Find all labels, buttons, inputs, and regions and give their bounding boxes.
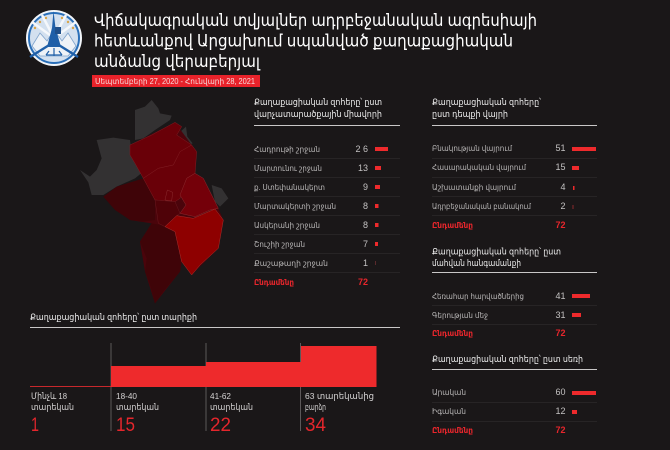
row: female <box>432 406 577 416</box>
row: residence: 51 <box>555 143 566 153</box>
row: workplace <box>432 182 574 192</box>
row: total: Ընդամենը <box>432 426 473 435</box>
row: total <box>432 220 566 230</box>
row: Kashatagh: Քաշաթաղի շրջան <box>254 259 328 268</box>
row: Martuni <box>254 163 381 173</box>
age group: 18-40: 18-40 <box>116 391 137 401</box>
row: Martakert: Մարտակերտի շրջան <box>254 202 336 211</box>
heading: circumstances of death: Քաղաքացիական զոհերը՝ ըստ <box>432 246 561 256</box>
row: residence <box>432 143 596 153</box>
age group: under 18: տարեկան <box>31 402 74 412</box>
panel: circumstances of death <box>432 246 597 338</box>
panel: place of incident <box>432 97 597 230</box>
row: Martakert <box>254 201 378 211</box>
silhouette base layer <box>103 122 223 303</box>
row: Askeran: Ասկերանի շրջան <box>254 221 320 230</box>
row: total <box>432 425 566 435</box>
age group: 63 and older: 63 տարեկանից <box>305 391 374 401</box>
map: Artsakh regions <box>80 100 228 303</box>
row: workplace: 4 <box>560 182 566 192</box>
row: long-range strikes <box>432 291 590 301</box>
row: Askeran <box>254 220 378 230</box>
title: հետևանքով Արցախում սպանված քաղաքացիական <box>94 32 513 50</box>
row: Martakert: 8 <box>363 201 368 211</box>
panel: administrative units <box>254 97 400 287</box>
age group: 41-62: տարեկան <box>210 402 253 412</box>
heading: by age: Քաղաքացիական զոհերը՝ ըստ տարիքի <box>30 312 197 322</box>
row: total: 72 <box>555 425 566 435</box>
heading: administrative units <box>254 97 400 126</box>
age group: 18-40 <box>116 391 159 436</box>
row: Hadrut <box>254 144 388 154</box>
row: Stepanakert: 9 <box>363 182 368 192</box>
row: Azerbaijani army: 2 <box>560 201 566 211</box>
row: Shushi: 7 <box>363 239 368 249</box>
row: total <box>432 328 566 338</box>
heading: place of incident: ըստ դեպքի վայրի <box>432 109 508 119</box>
row: Stepanakert: ք. Ստեփանակերտ <box>254 183 325 192</box>
row: male <box>432 387 596 397</box>
row: Askeran: 8 <box>363 220 368 230</box>
row: Hadrut: 2 6 <box>355 144 368 154</box>
row: long-range strikes: Հեռահար հարվածներից <box>432 292 524 301</box>
row: in captivity: 31 <box>555 310 566 320</box>
row: Kashatagh <box>254 258 376 268</box>
row: female: 12 <box>555 406 566 416</box>
heading: by sex: Քաղաքացիական զոհերը՝ ըստ սեռի <box>432 354 583 364</box>
row: in captivity <box>432 310 581 320</box>
row: in captivity: Գերության մեջ <box>432 311 488 320</box>
age group: 41-62 <box>210 391 253 436</box>
row: Kashatagh: 1 <box>363 258 368 268</box>
age group: 63 and older: 34 <box>305 414 326 436</box>
row: female: Իգական <box>432 407 466 416</box>
row: total: Ընդամենը <box>254 278 294 287</box>
row: male: 60 <box>555 387 566 397</box>
row: total: 72 <box>555 220 566 230</box>
heading: administrative units: վարչատարածքային միավորի <box>254 109 382 119</box>
heading: circumstances of death <box>432 246 597 272</box>
age group: 41-62: 22 <box>210 414 231 436</box>
row: Martuni: 13 <box>358 163 368 173</box>
row: public place: 15 <box>555 162 566 172</box>
row: male: Արական <box>432 388 466 397</box>
age group: under 18: Մինչև 18 <box>31 391 67 401</box>
row: long-range strikes: 41 <box>555 291 566 301</box>
row: total <box>254 277 368 287</box>
heading: place of incident: Քաղաքացիական զոհերը՝ <box>432 97 541 107</box>
row: residence: Բնակության վայրում <box>432 144 513 153</box>
row: total: Ընդամենը <box>432 221 473 230</box>
row: workplace: Աշխատանքի վայրում <box>432 183 517 192</box>
age group: 41-62: 41-62 <box>210 391 231 401</box>
age group: 18-40: տարեկան <box>116 402 159 412</box>
row: Hadrut: Հադրութի շրջան <box>254 145 320 154</box>
age chart: stepped bars <box>30 346 376 387</box>
row: public place <box>432 162 579 172</box>
title <box>94 12 537 71</box>
row: Shushi: Շուշիի շրջան <box>254 240 305 249</box>
panel: by age <box>30 312 400 436</box>
row: public place: Հասարակական վայրում <box>432 163 527 172</box>
icon: ombudsman emblem <box>26 10 82 66</box>
row: total: 72 <box>555 328 566 338</box>
heading: place of incident <box>432 97 597 126</box>
date badge: Սեպտեմբերի 27, 2020 - Հունվարի 28, 2021 <box>95 77 255 86</box>
title: Վիճակագրական տվյալներ ադրբեջանական ագրեսիայի <box>94 12 537 30</box>
age group: under 18 <box>31 391 74 436</box>
row: Shushi <box>254 239 378 249</box>
heading: administrative units: Քաղաքացիական զոհերը՝ ըստ <box>254 97 382 107</box>
panel: by sex <box>432 354 597 435</box>
row: Azerbaijani army: Ադրբեջանական բանակում <box>432 202 532 211</box>
title: անձանց վերաբերյալ <box>94 53 260 71</box>
row: total: 72 <box>358 277 368 287</box>
age group: 63 and older <box>305 391 374 436</box>
age group: 18-40: 15 <box>116 414 135 436</box>
heading: circumstances of death: մահվան հանգամանքի <box>432 258 521 268</box>
row: Stepanakert <box>254 182 380 192</box>
age group: 63 and older: բարձր <box>305 402 326 412</box>
row: total: Ընդամենը <box>432 329 473 338</box>
age group: under 18: 1 <box>31 414 39 436</box>
row: Martuni: Մարտունու շրջան <box>254 164 322 173</box>
